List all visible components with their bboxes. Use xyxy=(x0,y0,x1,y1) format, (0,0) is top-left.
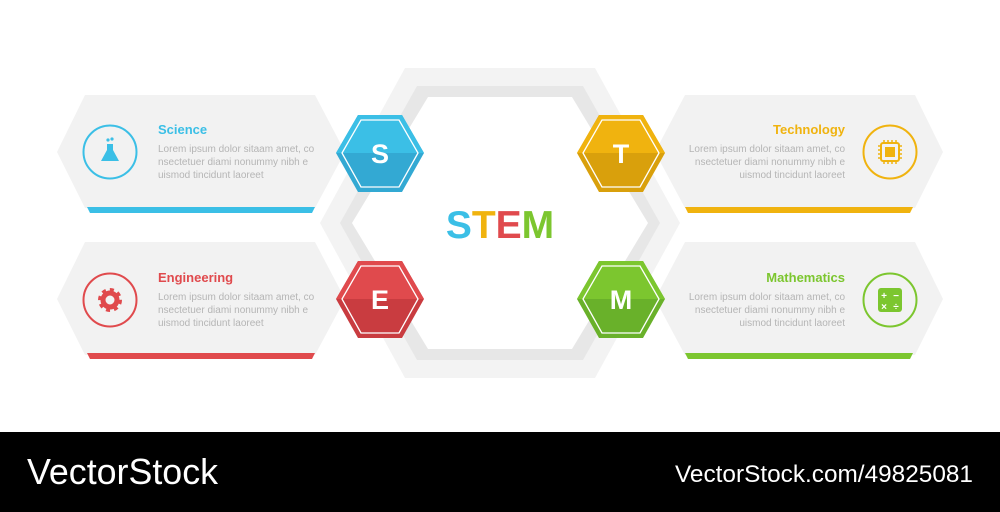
science text: nsectetuer diami nonummy nibh e xyxy=(158,157,309,168)
technology text: uismod tincidunt laoreet xyxy=(739,170,845,181)
footer id: VectorStock.com/49825081 xyxy=(675,461,973,488)
technology title: Technology xyxy=(773,122,846,137)
hex badge: M: M xyxy=(610,285,632,315)
technology text: Lorem ipsum dolor sitaam amet, co xyxy=(689,144,845,155)
technology text: nsectetuer diami nonummy nibh e xyxy=(695,157,845,168)
hex badge: S xyxy=(336,115,424,192)
icon: calculator: − xyxy=(893,291,899,302)
science text: Lorem ipsum dolor sitaam amet, co xyxy=(158,144,315,155)
technology bar xyxy=(685,207,913,213)
engineering text: nsectetuer diami nonummy nibh e xyxy=(158,305,309,316)
hex badge: T xyxy=(577,115,665,192)
icon: chip xyxy=(864,126,916,178)
panel: mathematics xyxy=(655,242,943,359)
science title: Science xyxy=(158,122,207,137)
hex badge: E xyxy=(336,261,424,338)
footer bar xyxy=(0,432,1000,512)
mathematics bar xyxy=(685,353,913,359)
icon: calculator: + xyxy=(881,291,887,302)
mathematics title: Mathematics xyxy=(766,270,845,285)
engineering text: uismod tincidunt laoreet xyxy=(158,318,264,329)
title: STEM: STEM xyxy=(446,204,554,247)
hex badge: S: S xyxy=(371,139,389,169)
panel: engineering xyxy=(57,242,345,359)
engineering title: Engineering xyxy=(158,270,233,285)
icon: calculator: ÷ xyxy=(893,302,899,313)
icon: flask xyxy=(84,126,136,178)
engineering bar xyxy=(87,353,315,359)
panel: technology xyxy=(655,95,943,213)
icon: gear xyxy=(84,274,136,326)
science bar xyxy=(87,207,315,213)
mathematics text: nsectetuer diami nonummy nibh e xyxy=(695,305,845,316)
hex badge: E: E xyxy=(371,285,389,315)
central hexagon frame xyxy=(320,68,680,378)
science text: uismod tincidunt laoreet xyxy=(158,170,264,181)
hex badge: T: T xyxy=(613,139,630,169)
icon: calculator: × xyxy=(881,302,887,313)
icon: calculator xyxy=(864,274,916,326)
panel: science xyxy=(57,95,345,213)
footer logo: VectorStock xyxy=(27,451,219,492)
engineering text: Lorem ipsum dolor sitaam amet, co xyxy=(158,292,315,303)
hex badge: M xyxy=(577,261,665,338)
mathematics text: Lorem ipsum dolor sitaam amet, co xyxy=(689,292,845,303)
mathematics text: uismod tincidunt laoreet xyxy=(739,318,845,329)
